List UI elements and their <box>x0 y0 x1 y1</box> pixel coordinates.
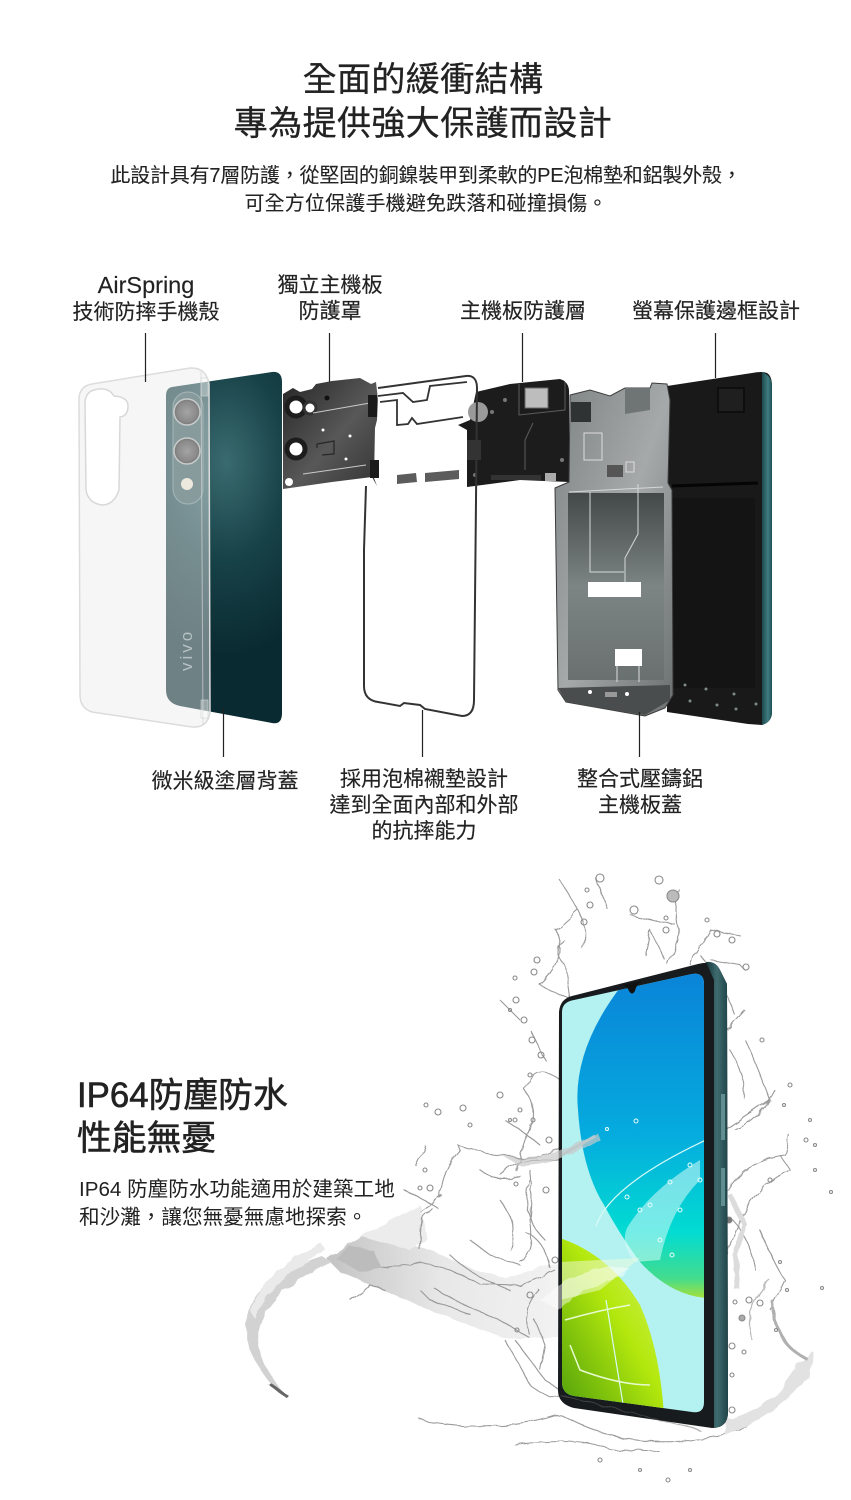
rear phone frame with display back <box>667 372 772 725</box>
IP64 heading: IP64防塵防水 <box>77 1076 288 1115</box>
label: foam gasket <box>330 768 518 843</box>
foam gasket <box>364 376 477 716</box>
vivo logo: vivo <box>177 629 196 671</box>
water on screen <box>625 1160 700 1262</box>
IP64 heading: 性能無憂 <box>77 1119 216 1158</box>
notch <box>622 981 642 994</box>
leader lines <box>146 333 716 757</box>
back cover <box>166 372 282 723</box>
label: back cover: 微米級塗層背蓋 <box>152 770 298 793</box>
extra fine tendrils <box>450 1120 540 1290</box>
label: foam gasket: 採用泡棉襯墊設計 <box>340 768 508 791</box>
IP64 body text <box>79 1178 395 1229</box>
blue wallpaper shape <box>577 970 706 1298</box>
main board shield <box>283 378 379 489</box>
water behind phone <box>246 878 814 1452</box>
label: board shield: 防護罩 <box>298 300 362 323</box>
label: board shield <box>278 274 382 323</box>
IP64 heading <box>77 1076 288 1158</box>
exploded phone diagram <box>78 333 772 757</box>
motherboard <box>458 379 569 487</box>
main splash band <box>326 1236 560 1338</box>
label: die-cast cover: 主機板蓋 <box>598 794 682 817</box>
foam strips <box>397 470 459 484</box>
lime wallpaper shape <box>560 1238 664 1416</box>
label: screen bezel: 螢幕保護邊框設計 <box>632 300 800 323</box>
label: AirSpring case: 技術防摔手機殼 <box>72 301 220 324</box>
label: board shield: 獨立主機板 <box>278 274 382 297</box>
title <box>234 61 612 143</box>
title: 全面的緩衝結構 <box>303 61 543 99</box>
label: foam gasket: 達到全面內部和外部 <box>330 794 518 817</box>
label: AirSpring case: AirSpring <box>98 272 194 298</box>
phone body <box>558 963 728 1428</box>
right water wave <box>725 1352 814 1436</box>
label: board protection layer: 主機板防護層 <box>460 300 586 323</box>
label: AirSpring case <box>72 272 220 324</box>
label: foam gasket: 的抗摔能力 <box>372 820 476 843</box>
IP64 body text: 和沙灘，讓您無憂無慮地探索。 <box>79 1206 367 1229</box>
label: die-cast cover <box>577 768 703 817</box>
droplets <box>418 874 832 1482</box>
title: 專為提供強大保護而設計 <box>234 105 612 143</box>
die-cast aluminium cover <box>555 383 673 716</box>
intro text: 可全方位保護手機避免跌落和碰撞損傷。 <box>244 193 608 215</box>
camera module <box>173 392 203 504</box>
intro text <box>110 164 742 215</box>
lower phone <box>558 962 728 1428</box>
screen <box>560 970 706 1416</box>
transparent case <box>79 368 210 727</box>
IP64 body text: IP64 防塵防水功能適用於建築工地 <box>79 1178 395 1201</box>
water splash and phone <box>245 874 833 1482</box>
intro text: 此設計具有7層防護，從堅固的銅鎳裝甲到柔軟的PE泡棉墊和鋁製外殼， <box>110 165 742 187</box>
label: die-cast cover: 整合式壓鑄鋁 <box>577 768 703 791</box>
water over phone <box>500 1133 700 1430</box>
